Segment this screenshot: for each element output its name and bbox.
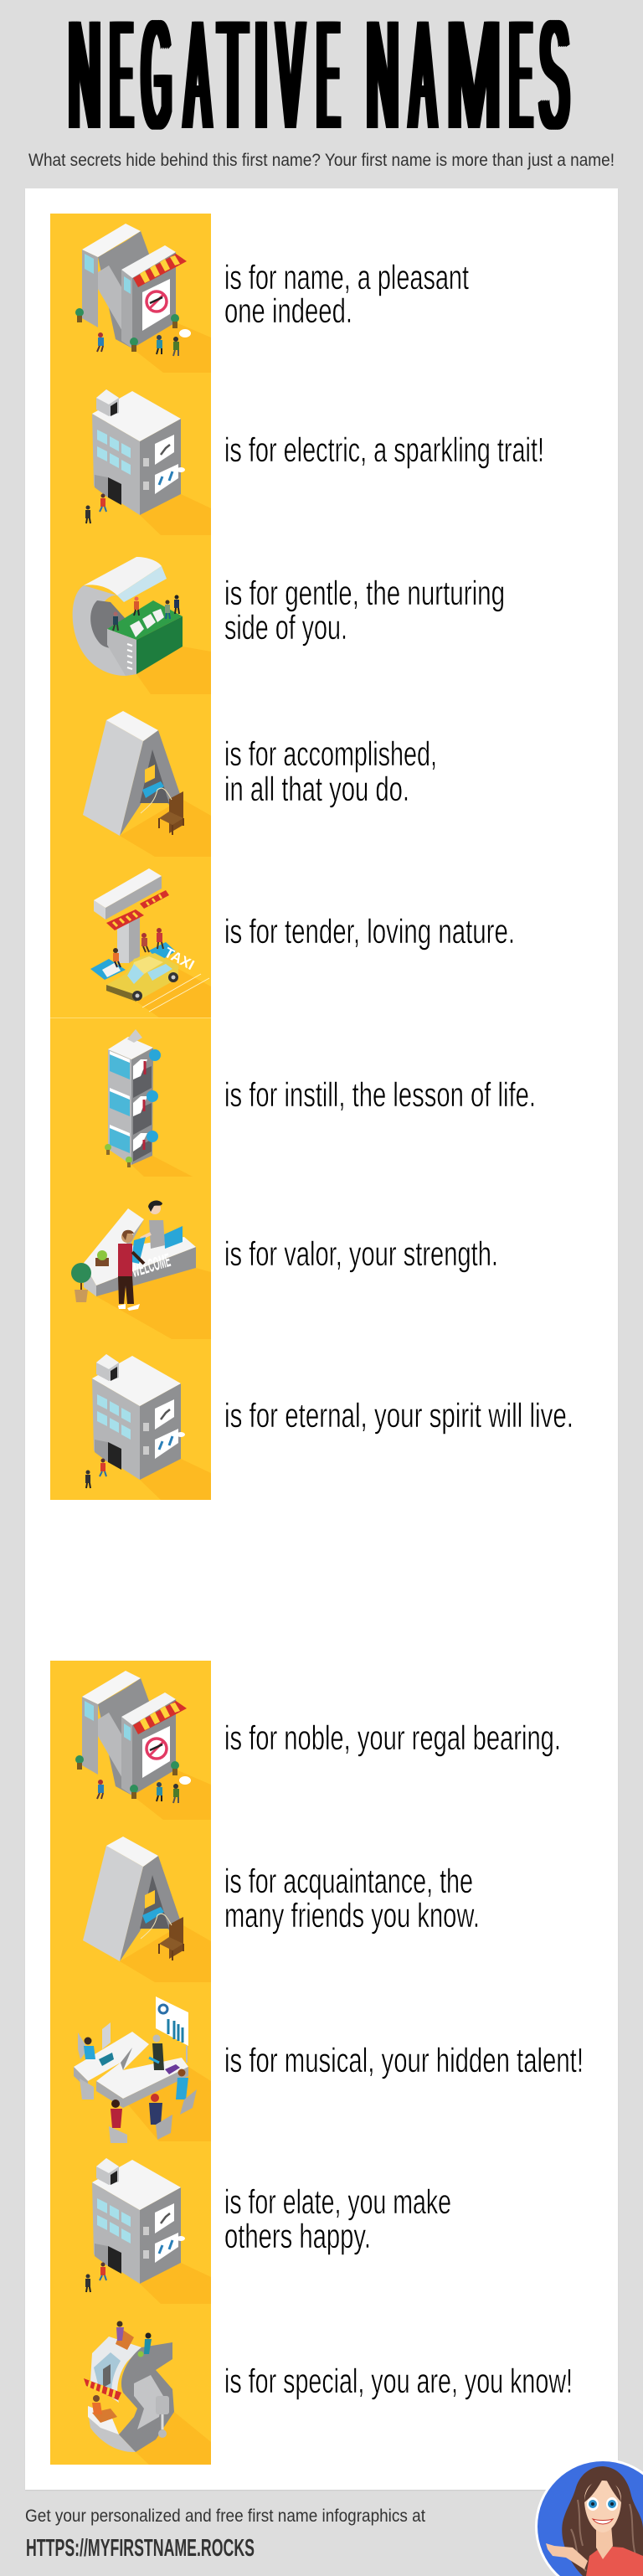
text: elate line: others happy.	[224, 2217, 371, 2255]
row: N is for name	[50, 214, 469, 374]
text: name line	[224, 258, 469, 330]
text: acquaintance line	[224, 1862, 480, 1935]
icon: isometric letter A with chair	[50, 696, 211, 857]
row: V is for valor	[50, 1178, 498, 1339]
icon: isometric letter E building	[50, 2143, 211, 2304]
icon: isometric letter I tower	[50, 1018, 211, 1178]
row: S is for special	[50, 2304, 573, 2465]
text: name line: is for name, a pleasant	[224, 258, 469, 296]
text: valor line: is for valor, your strength.	[224, 1234, 498, 1273]
icon: isometric letter T with taxi: TAXI	[162, 945, 197, 973]
text: acquaintance line: many friends you know.	[224, 1896, 480, 1935]
icon: isometric letter N with awning	[50, 214, 211, 374]
row: E is for elate	[50, 2143, 451, 2304]
icon: isometric letter M meeting table	[50, 1982, 211, 2143]
text: accomplished line	[224, 734, 437, 808]
title	[69, 0, 571, 162]
avatar: cartoon woman in blue circle	[527, 2454, 643, 2576]
row: T is for tender	[50, 857, 515, 1018]
icon: isometric letter E building	[50, 1339, 211, 1500]
row: M is for musical	[50, 1982, 584, 2143]
text: accomplished line: in all that you do.	[224, 770, 409, 808]
row: N is for noble	[50, 1661, 561, 1821]
icon: isometric letter E building	[50, 374, 211, 535]
icon: isometric letter S with awning	[50, 2304, 211, 2465]
text: elate line	[224, 2182, 451, 2255]
text: accomplished line: is for accomplished,	[224, 734, 437, 773]
row: A is for accomplished	[50, 696, 437, 857]
text: gentle line: is for gentle, the nurturing	[224, 574, 505, 612]
footer: website url: HTTPS://MYFIRSTNAME.ROCKS	[26, 2535, 255, 2562]
icon: isometric letter A with chair	[50, 1821, 211, 1982]
text: acquaintance line: is for acquaintance, the	[224, 1862, 473, 1900]
text: gentle line: side of you.	[224, 608, 347, 647]
row: E is for eternal	[50, 1339, 574, 1500]
row: I is for instill	[50, 1018, 536, 1178]
text: name line: one indeed.	[224, 291, 352, 330]
row: A is for acquaintance	[50, 1821, 480, 1982]
icon: isometric letter T with taxi	[50, 857, 211, 1018]
icon: isometric letter G with green block	[50, 535, 211, 696]
text: elate line: is for elate, you make	[224, 2182, 451, 2221]
icon: isometric letter V reception desk	[50, 1178, 211, 1339]
row: G is for gentle	[50, 535, 505, 696]
icon: isometric letter V reception desk: WELCOME	[129, 1249, 173, 1282]
row: E is for electric	[50, 374, 544, 535]
text: gentle line	[224, 574, 505, 647]
icon: isometric letter N with awning	[50, 1661, 211, 1821]
footer: call to action: Get your personalized and free first name infographics at	[25, 2506, 425, 2526]
